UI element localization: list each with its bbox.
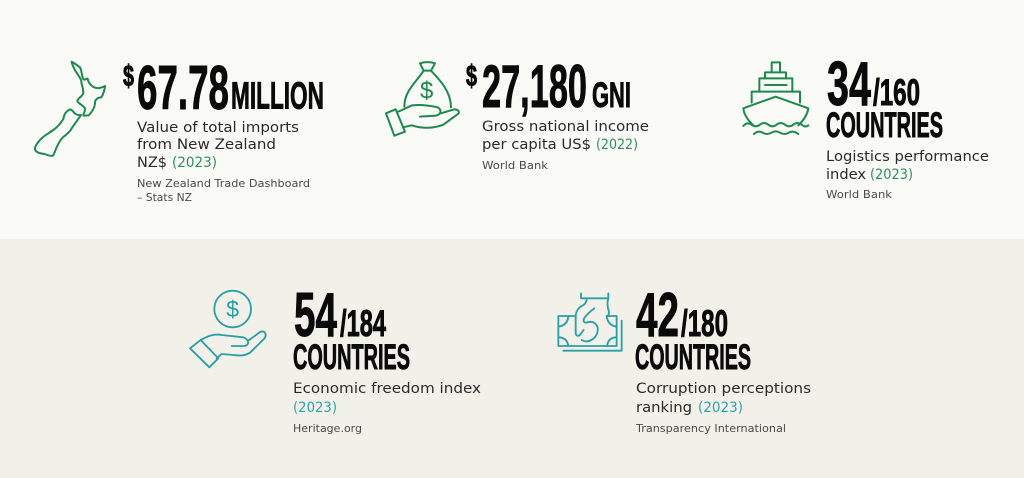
description: economic freedom: (2023) [293, 400, 337, 416]
icon: banknote in hand [558, 293, 622, 351]
source: Stats NZ: New Zealand Trade Dashboard [137, 177, 310, 190]
figure: 42/180 countries: COUNTRIES [635, 338, 751, 377]
figure: 42/180 countries: 42 [636, 281, 679, 350]
icon: money bag on hand [386, 62, 459, 136]
description: imports: NZ$ [137, 155, 167, 171]
description: corruption [636, 381, 811, 416]
figure: 42/180 countries [635, 281, 751, 377]
figure: $67.78 million: $ [123, 60, 134, 93]
figure: 42/180 countries: /180 [681, 303, 728, 344]
figure: $67.78 million: 67.78 [137, 54, 229, 123]
description: corruption: (2023) [698, 400, 743, 416]
figure: $27,180 GNI: $ [466, 60, 477, 93]
source: Transparency International: Transparency International [635, 422, 786, 435]
description: GNI: per capita US$ [482, 137, 591, 153]
description: GNI [482, 119, 649, 153]
panel: bottom background [0, 239, 1024, 478]
figure: 54/184 countries [293, 281, 410, 377]
source: World Bank: World Bank [482, 159, 549, 172]
panel: top background [0, 0, 1024, 239]
description: corruption: Corruption perceptions [636, 381, 811, 397]
source: Stats NZ [137, 177, 310, 204]
description: imports: Value of total imports [137, 120, 299, 136]
description: economic freedom: Economic freedom index [293, 381, 481, 397]
stat: imports from New Zealand [35, 54, 324, 204]
figure: 54/184 countries: 54 [294, 281, 337, 350]
figure: $67.78 million: MILLION [231, 76, 324, 118]
description: logistics: (2023) [870, 167, 913, 183]
figure: 54/184 countries: COUNTRIES [293, 338, 410, 377]
icon: New Zealand map [35, 62, 105, 156]
description: imports: (2023) [172, 155, 217, 171]
description: logistics: Logistics performance [826, 149, 989, 165]
description: imports [137, 120, 299, 171]
icon: money bag on hand: $ [420, 78, 433, 105]
stat: corruption perceptions [558, 281, 811, 435]
description: logistics [826, 149, 989, 183]
description: economic freedom [293, 381, 481, 416]
figure: 34/160 countries: /160 [873, 72, 920, 113]
source: Stats NZ: – Stats NZ [137, 191, 192, 204]
description: corruption: ranking [636, 400, 692, 416]
icon: coin above hand [190, 291, 266, 367]
description: logistics: index [826, 167, 866, 183]
icon: ship [743, 62, 808, 134]
figure: 34/160 countries: 34 [827, 50, 871, 119]
figure: $27,180 GNI: 27,180 [482, 53, 587, 120]
description: GNI: (2022) [596, 137, 638, 153]
icon: coin above hand: $ [226, 296, 239, 322]
stat: economic freedom [190, 281, 481, 435]
description: GNI: Gross national income [482, 119, 649, 135]
description: imports: from New Zealand [137, 137, 276, 153]
figure: 54/184 countries: /184 [340, 303, 386, 344]
source: World Bank: World Bank [826, 188, 893, 201]
figure: 34/160 countries [826, 50, 943, 145]
stat: logistics performance [743, 50, 989, 201]
source: Heritage.org: Heritage.org [293, 422, 362, 435]
stat: gross national income [386, 53, 649, 172]
figure: $27,180 GNI: GNI [592, 76, 631, 115]
